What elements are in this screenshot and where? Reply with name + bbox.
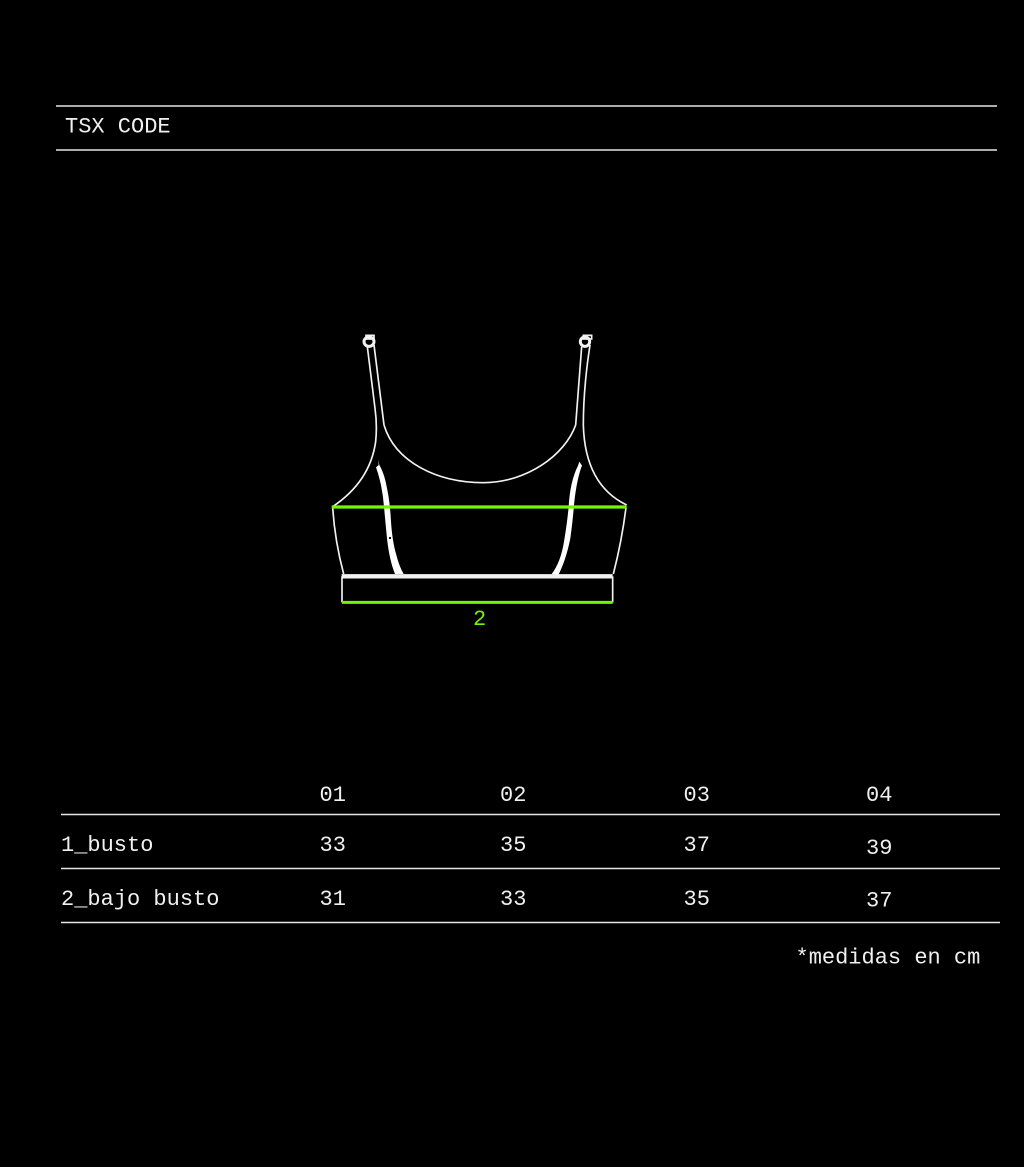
garment diagram: bra with measurement lines <box>332 335 627 602</box>
row: busto: 35 <box>500 833 526 858</box>
left strap and buckle <box>333 335 384 507</box>
side seams <box>333 508 626 574</box>
column headers: 04 <box>866 783 892 808</box>
row: bajo busto: 31 <box>320 887 346 912</box>
row: bajo busto <box>61 887 892 914</box>
row: bajo busto: 37 <box>866 888 892 914</box>
row: busto <box>61 833 892 861</box>
title: TSX CODE <box>65 114 171 140</box>
measurement label 2: 2 <box>473 607 486 632</box>
column headers: 01 <box>320 783 346 808</box>
column headers: 02 <box>500 783 526 808</box>
row: bajo busto: 2_bajo busto <box>61 887 219 912</box>
row: busto: 39 <box>866 836 892 861</box>
row: busto: 37 <box>684 833 710 858</box>
right cup seam <box>552 462 582 575</box>
left cup seam <box>376 460 404 574</box>
waistband <box>342 576 613 602</box>
row: bajo busto: 33 <box>500 887 526 912</box>
column headers: 03 <box>684 783 710 808</box>
neckline <box>384 425 576 483</box>
row: busto: 1_busto <box>61 833 153 858</box>
measurement line 1 <box>332 502 627 512</box>
row: busto: 33 <box>320 833 346 858</box>
row: bajo busto: 35 <box>684 887 710 912</box>
right strap and buckle <box>576 335 627 505</box>
column headers <box>320 783 892 808</box>
measurement line 2 <box>342 598 613 607</box>
footnote: *medidas en cm <box>796 946 980 970</box>
size table <box>61 783 1000 922</box>
